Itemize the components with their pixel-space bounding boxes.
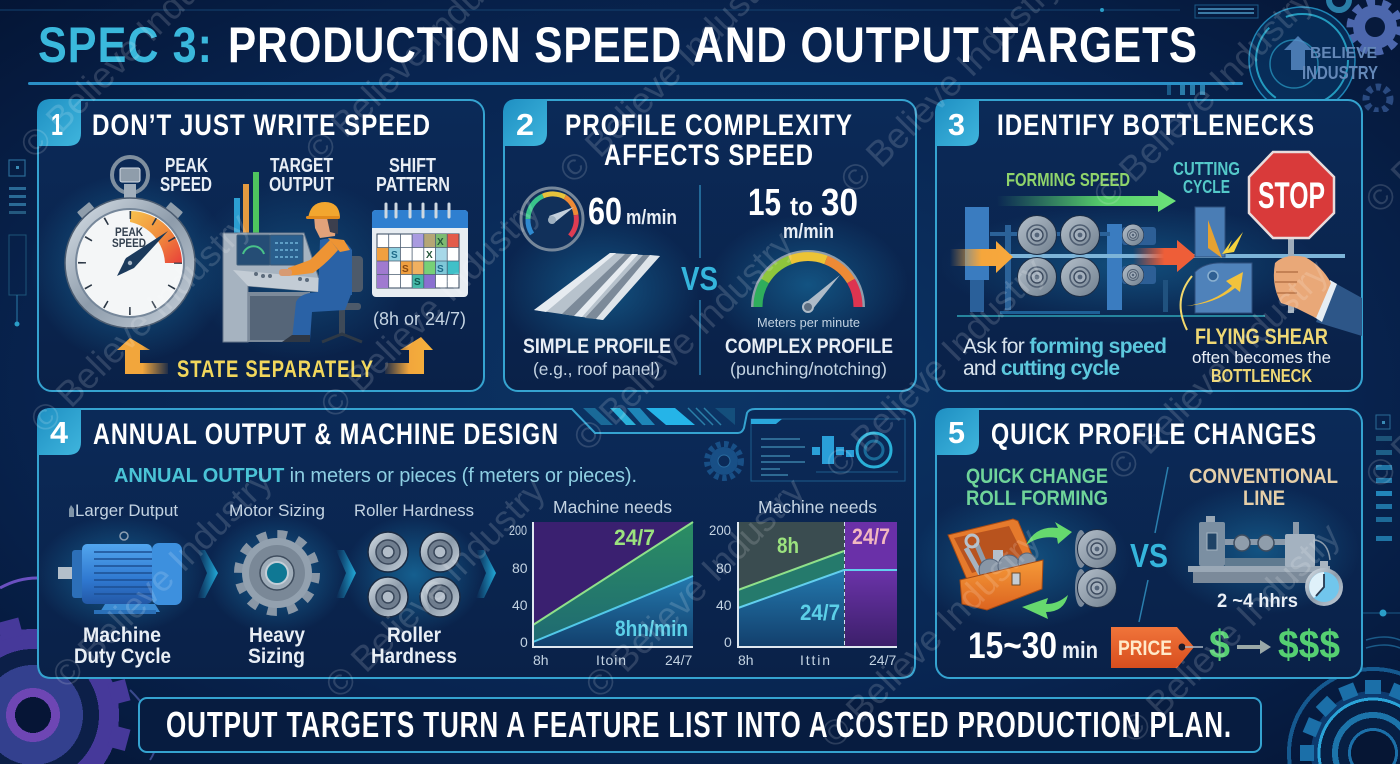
icon: electric motor bbox=[58, 532, 182, 614]
label: quick change roll forming: ROLL FORMING bbox=[966, 487, 1108, 510]
chart: machine needs right bbox=[709, 497, 897, 668]
chart: machine needs left: Itoin bbox=[596, 652, 626, 668]
chart: machine needs left: 80 bbox=[512, 560, 528, 576]
heading: PROFILE COMPLEXITY bbox=[565, 109, 853, 142]
top right logo: globe and gears: INDUSTRY bbox=[1302, 63, 1378, 83]
arrow: right state separately bbox=[385, 337, 433, 374]
watermarks: © Believe Industry bbox=[22, 205, 258, 441]
icon: stopwatch: SPEED bbox=[112, 236, 146, 250]
badge 1: 1 bbox=[51, 107, 63, 142]
divider and vs: VS bbox=[681, 260, 718, 297]
callout: flying shear: FLYING SHEAR bbox=[1195, 324, 1328, 349]
value: 60 m/min: m/min bbox=[626, 207, 677, 229]
badge 4 bbox=[37, 408, 81, 455]
watermarks: © Believe Industry bbox=[1112, 515, 1348, 751]
chart: machine needs left: 8hn/min bbox=[615, 616, 688, 641]
divider and vs bbox=[1130, 467, 1168, 622]
icon: slow gauge bbox=[753, 252, 863, 312]
step caption: roller hardness: Roller bbox=[387, 624, 441, 647]
arrow: swap up bbox=[1026, 522, 1072, 545]
callout: flying shear: often becomes the bbox=[1192, 348, 1331, 367]
icon: shift calendar bbox=[372, 204, 468, 297]
value: 15~30 min: min bbox=[1062, 637, 1098, 663]
value: 60 m/min bbox=[588, 191, 677, 233]
bottom takeaway banner bbox=[139, 698, 1261, 752]
icon: toolbox bbox=[948, 519, 1043, 610]
text: ask for forming speed: Ask for forming speed bbox=[963, 335, 1167, 358]
chart: machine needs right: 0 bbox=[724, 634, 732, 650]
heading: AFFECTS SPEED bbox=[604, 139, 814, 172]
gauge caption: Meters per minute bbox=[757, 316, 860, 330]
label: shift pattern: SHIFT bbox=[389, 155, 436, 177]
price increase: $$$ bbox=[1278, 623, 1340, 667]
text: ask for forming speed: and cutting cycle bbox=[963, 357, 1120, 380]
step labels bbox=[69, 501, 474, 520]
label: complex profile: COMPLEX PROFILE bbox=[725, 335, 893, 358]
arrow: swap down bbox=[1022, 595, 1068, 619]
label: target output: TARGET bbox=[270, 155, 333, 177]
chart: machine needs left: 40 bbox=[512, 597, 528, 613]
icon: roll forming machine bbox=[957, 207, 1345, 316]
step caption: machine duty cycle: Machine bbox=[83, 624, 161, 647]
icon: flying shear bbox=[1181, 207, 1252, 330]
chart: machine needs left: 200 bbox=[509, 522, 527, 538]
label: cutting cycle bbox=[1173, 159, 1240, 197]
icon: hand holding sign bbox=[1274, 256, 1362, 336]
title accent: SPEC 3: bbox=[38, 17, 213, 73]
chart: machine needs left: 24/7 bbox=[614, 525, 655, 550]
icon: stopwatch: PEAK bbox=[115, 225, 143, 239]
step caption: heavy sizing: Sizing bbox=[248, 645, 305, 668]
label: conventional line bbox=[1189, 465, 1338, 510]
icon: shift calendar: X bbox=[426, 250, 433, 261]
chevron 2 bbox=[336, 550, 356, 598]
icon: shift calendar: S bbox=[437, 264, 444, 275]
chevron 3 bbox=[476, 550, 496, 598]
subtitle: ANNUAL OUTPUT in meters or pieces (f meters or pieces). bbox=[114, 465, 637, 487]
watermarks: © Believe Industry bbox=[1100, 252, 1336, 488]
background gear: bottom left purple bbox=[0, 578, 170, 764]
step labels: Motor Sizing bbox=[229, 501, 325, 520]
top right logo: globe and gears: BELIEVE bbox=[1310, 45, 1377, 62]
badge 5: 5 bbox=[948, 415, 965, 450]
icon: stop sign: STOP bbox=[1258, 175, 1325, 216]
label: simple profile: SIMPLE PROFILE bbox=[523, 335, 671, 358]
value: 15 to 30 m/min: 30 bbox=[821, 182, 858, 224]
chart: machine needs left: 0 bbox=[520, 634, 528, 650]
label: shift pattern bbox=[376, 155, 450, 196]
watermarks: © Believe Industry bbox=[817, 250, 1053, 486]
icon: shift calendar: S bbox=[414, 277, 421, 288]
icon: operator at console bbox=[223, 202, 363, 342]
price increase: $ bbox=[1209, 623, 1230, 667]
chart: machine needs left: 24/7 bbox=[665, 652, 692, 668]
chart: machine needs right: 200 bbox=[709, 522, 731, 538]
badge 2 bbox=[503, 99, 547, 146]
chart: machine needs left: Machine needs bbox=[553, 497, 672, 517]
icon: conventional stopwatch bbox=[1305, 561, 1343, 606]
value: 15 to 30 m/min: m/min bbox=[783, 221, 834, 243]
label: shift pattern: PATTERN bbox=[376, 174, 450, 196]
arrow: left state separately bbox=[117, 338, 168, 374]
chart: machine needs right: 80 bbox=[716, 560, 732, 576]
mini schematic bbox=[751, 419, 905, 481]
step labels: Roller Hardness bbox=[354, 501, 474, 520]
watermarks: © Believe Industry bbox=[812, 520, 1048, 756]
chart: machine needs right: Machine needs bbox=[758, 497, 877, 517]
label: simple profile bbox=[523, 335, 671, 379]
top HUD lines bbox=[0, 5, 1258, 95]
icon: stop sign bbox=[1249, 152, 1334, 313]
value: 60 m/min: 60 bbox=[588, 191, 622, 233]
label: quick change roll forming: QUICK CHANGE bbox=[966, 465, 1108, 488]
arrow: forming speed bbox=[997, 190, 1176, 212]
label: quick change roll forming bbox=[966, 465, 1108, 510]
top right logo: globe and gears bbox=[1248, 0, 1400, 112]
callout: flying shear bbox=[1192, 324, 1331, 386]
label: conventional line: CONVENTIONAL bbox=[1189, 465, 1338, 488]
icon: roof panel bbox=[534, 253, 660, 320]
badge 1 bbox=[37, 99, 81, 146]
callout: flying shear: BOTTLENECK bbox=[1211, 366, 1312, 386]
watermarks: © Believe Industry bbox=[565, 223, 801, 459]
chart: machine needs right: Ittin bbox=[800, 652, 830, 668]
label: complex profile: (punching/notching) bbox=[730, 359, 887, 379]
watermarks: © Believe Industry bbox=[312, 190, 548, 426]
heading: DON’T JUST WRITE SPEED bbox=[92, 109, 431, 142]
badge 4: 4 bbox=[50, 415, 69, 450]
label: conventional line: LINE bbox=[1243, 487, 1285, 510]
label: target output: OUTPUT bbox=[269, 174, 334, 196]
label: cutting cycle: CYCLE bbox=[1183, 177, 1230, 197]
label: forming speed: FORMING SPEED bbox=[1006, 170, 1130, 190]
chart: machine needs left bbox=[509, 497, 693, 668]
badge 2: 2 bbox=[516, 107, 534, 142]
watermarks: © Believe Industry bbox=[317, 470, 553, 706]
icon: shift calendar: S bbox=[391, 250, 398, 261]
decorative hatch stripes bbox=[583, 408, 735, 425]
chart: machine needs right: 8h bbox=[738, 652, 754, 668]
value: 15 to 30 m/min: to bbox=[790, 191, 813, 221]
icon: large gear bbox=[239, 535, 315, 611]
title rule bbox=[28, 82, 1243, 85]
step caption: machine duty cycle bbox=[74, 624, 171, 668]
label: peak speed: PEAK bbox=[165, 155, 208, 177]
watermarks: © Believe Industry bbox=[44, 460, 280, 696]
icon: price tag: PRICE bbox=[1118, 637, 1172, 660]
label: complex profile bbox=[725, 335, 893, 379]
divider and vs: VS bbox=[1130, 537, 1168, 574]
icon: hardened rollers bbox=[368, 532, 460, 617]
label: peak speed: SPEED bbox=[160, 174, 212, 196]
badge 5 bbox=[935, 408, 979, 455]
heading: IDENTIFY BOTTLENECKS bbox=[997, 109, 1315, 142]
step caption: roller hardness bbox=[371, 624, 457, 668]
heading: QUICK PROFILE CHANGES bbox=[991, 418, 1317, 451]
label: cutting cycle: CUTTING bbox=[1173, 159, 1240, 179]
step labels: Larger Dutput bbox=[75, 501, 178, 520]
price increase bbox=[1209, 623, 1340, 667]
chart: machine needs right: 24/7 bbox=[869, 652, 896, 668]
icon: price tag bbox=[1111, 627, 1203, 668]
chevron 1 bbox=[197, 550, 218, 598]
label: shift hours: (8h or 24/7) bbox=[373, 309, 466, 329]
chart: machine needs right: 8h bbox=[777, 533, 799, 558]
step caption: machine duty cycle: Duty Cycle bbox=[74, 645, 171, 668]
panel 4: annual output and machine design bbox=[35, 408, 915, 678]
icon: shift calendar: S bbox=[402, 264, 409, 275]
label: simple profile: (e.g., roof panel) bbox=[533, 359, 660, 379]
watermarks: © Believe Industry bbox=[577, 470, 813, 706]
icon: decorative gear bbox=[707, 444, 741, 478]
value: 15~30 min: 15~30 bbox=[968, 625, 1057, 666]
arrow: material in bbox=[950, 241, 1013, 273]
value: 15 to 30 m/min bbox=[748, 182, 858, 243]
icon: roll tooling bbox=[1075, 530, 1116, 608]
heading: ANNUAL OUTPUT & MACHINE DESIGN bbox=[93, 418, 559, 451]
panel 1: don't just write speed bbox=[30, 99, 484, 391]
icon: shift calendar: X bbox=[437, 237, 444, 248]
heading bbox=[565, 109, 853, 172]
panel 5: quick profile changes bbox=[910, 408, 1362, 678]
callout: state separately: STATE SEPARATELY bbox=[177, 356, 374, 383]
arrow: into shear bbox=[1133, 240, 1196, 272]
step caption: heavy sizing bbox=[248, 624, 305, 668]
icon: fast gauge bbox=[521, 188, 583, 250]
value: 15 to 30 m/min: 15 bbox=[748, 182, 781, 224]
background gear: bottom right blue bbox=[1270, 660, 1400, 764]
right side HUD bbox=[1362, 415, 1400, 648]
label: peak speed bbox=[160, 155, 212, 196]
panel 3: identify bottlenecks bbox=[935, 99, 1362, 391]
label: target output bbox=[269, 155, 334, 196]
title main: PRODUCTION SPEED AND OUTPUT TARGETS bbox=[228, 17, 1198, 73]
chart: machine needs left: 8h bbox=[533, 652, 549, 668]
chart: machine needs right: 40 bbox=[716, 597, 732, 613]
step caption: roller hardness: Hardness bbox=[371, 645, 457, 668]
icon: stopwatch bbox=[65, 157, 195, 328]
badge 3 bbox=[935, 99, 979, 146]
left side HUD bbox=[9, 160, 26, 326]
chart: machine needs right: 24/7 bbox=[800, 600, 840, 625]
chart: machine needs right: 24/7 bbox=[852, 524, 890, 549]
icon: conventional line machine bbox=[1188, 516, 1330, 583]
panel 2: profile complexity bbox=[500, 99, 916, 391]
title bbox=[38, 17, 1198, 73]
badge 3: 3 bbox=[948, 107, 965, 142]
text: ask for forming speed bbox=[963, 335, 1167, 380]
label: changeover hours: 2 ~4 hhrs bbox=[1217, 591, 1298, 612]
step caption: heavy sizing: Heavy bbox=[249, 624, 305, 647]
icon: target bars bbox=[234, 172, 259, 234]
